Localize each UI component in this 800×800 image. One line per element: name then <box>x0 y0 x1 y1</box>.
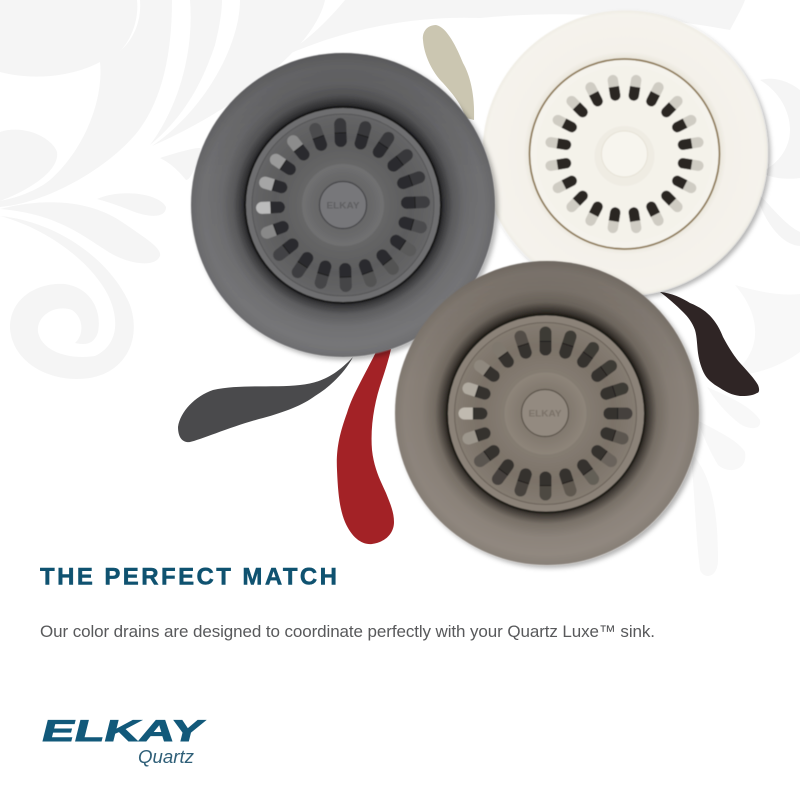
gray basket plate <box>252 114 434 296</box>
taupe basket ring <box>447 314 645 512</box>
gray basket ring <box>245 107 441 303</box>
body text: Our color drains are designed to coordinate perfectly with your Quartz Luxe™ sink. <box>40 622 655 641</box>
taupe basket plate <box>454 322 636 504</box>
gray cap logo: ELKAY <box>326 200 360 210</box>
drain: taupe <box>395 261 699 565</box>
drain: gray <box>191 53 495 357</box>
taupe center cap <box>522 390 568 436</box>
drain: cream <box>482 10 768 296</box>
taupe cap logo: ELKAY <box>528 408 562 418</box>
gray flange top shading <box>191 53 495 357</box>
heading: THE PERFECT MATCH <box>40 564 337 590</box>
gray flange <box>191 53 495 357</box>
cream flange <box>482 10 768 296</box>
swoosh: beige <box>423 25 474 120</box>
gray center dish <box>302 164 384 246</box>
taupe flange top shading <box>395 261 699 565</box>
swoosh: charcoal <box>178 357 353 442</box>
gray slots <box>256 118 430 292</box>
taupe center dish <box>504 372 586 454</box>
logo: Elkay Quartz <box>38 714 208 767</box>
cream basket ring <box>530 59 720 249</box>
taupe slots <box>458 326 632 500</box>
gray center cap <box>320 182 366 228</box>
cream basket plate <box>536 66 712 242</box>
swoosh: red <box>337 349 394 544</box>
cream slots <box>545 74 704 234</box>
background floral watermark <box>0 0 800 576</box>
swoosh: dark brown <box>660 292 759 396</box>
cream center cap <box>602 131 648 177</box>
taupe flange <box>395 261 699 565</box>
cream center dish <box>594 126 654 186</box>
logo wordmark: ELKAY <box>38 714 208 748</box>
logo subtitle: Quartz <box>138 747 194 767</box>
